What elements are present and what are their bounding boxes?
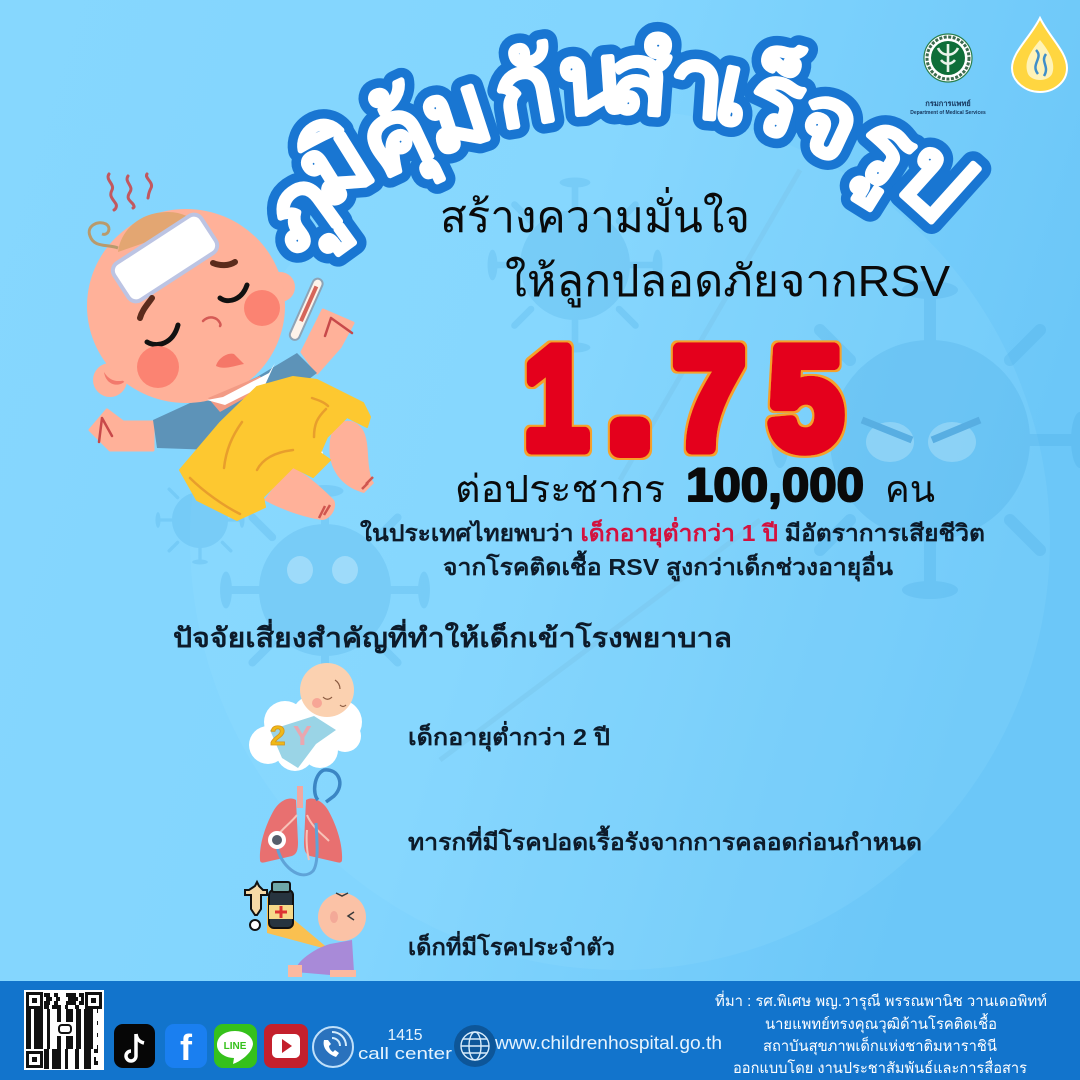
description	[360, 516, 985, 582]
title: curved headline: ภู	[241, 145, 362, 278]
title: curved headline: ป	[875, 118, 995, 241]
key number: 1	[524, 318, 588, 479]
title: curved headline: ม	[408, 51, 503, 176]
risk item 2 label: ทารกที่มีโรคปอดเรื้อรังจากการคลอดก่อนกำหนด	[408, 825, 922, 855]
title: curved headline: คุ้	[342, 72, 451, 206]
per population line	[455, 458, 935, 511]
key number: 5	[769, 319, 843, 479]
source credit: สถาบันสุขภาพเด็กแห่งชาติมหาราชินี	[763, 1036, 997, 1056]
risk item 3: baby with medicine	[245, 882, 366, 977]
icon: globe	[454, 1025, 496, 1067]
subtitle: สร้างความมั่นใจ	[440, 186, 750, 242]
title: curved headline: จ	[780, 59, 878, 183]
title: curved headline: น	[554, 22, 629, 136]
website: www.childrenhospital.go.th	[494, 1033, 722, 1053]
icon: line	[214, 1024, 257, 1068]
source credit: ที่มา : รศ.พิเศษ พญ.วารุณี พรรณพานิช วานเดอพิทท์	[715, 990, 1047, 1011]
title: curved headline: จ	[780, 59, 878, 183]
per population line: ต่อประชากร	[455, 469, 665, 511]
title: curved headline: รู	[830, 88, 937, 215]
call center label: call center	[358, 1044, 452, 1063]
risk item 3 label: เด็กที่มีโรคประจำตัว	[408, 930, 615, 960]
key number	[524, 318, 843, 480]
logo: Department of Medical Services	[910, 34, 986, 116]
logo: Department of Medical Services: Department of Medical Services	[910, 110, 986, 116]
title: curved headline: กั	[485, 31, 564, 149]
call center label	[358, 1027, 452, 1063]
logo: Department of Medical Services: กรมการแพทย์	[925, 99, 971, 108]
icon: call center	[313, 1027, 353, 1067]
title: curved headline	[241, 22, 995, 278]
risk item 1: under 2 years	[249, 663, 362, 771]
risk item 2: lungs	[260, 770, 342, 875]
footer bar	[0, 981, 1080, 1080]
title: curved headline: สำ	[606, 22, 728, 140]
icon: youtube	[264, 1024, 308, 1068]
title: curved headline: ร็	[736, 36, 818, 160]
title: curved headline: เ	[706, 33, 762, 147]
description: ในประเทศไทยพบว่า เด็กอายุต่ำกว่า 1 ปี มีอัตราการเสียชีวิต	[360, 516, 985, 548]
title: curved headline: มิ	[278, 100, 391, 228]
subtitle: ให้ลูกปลอดภัยจากRSV	[505, 256, 951, 308]
source credit: นายแพทย์ทรงคุณวุฒิด้านโรคติดเชื้อ	[765, 1013, 997, 1034]
icon: tiktok	[114, 1024, 155, 1068]
title: curved headline: ร็	[736, 36, 818, 160]
title: curved headline: ภู	[241, 145, 362, 278]
source credit	[715, 990, 1047, 1077]
key number: 7	[673, 319, 745, 480]
risk item 1: under 2 years: 2	[270, 720, 286, 751]
title: curved headline: มิ	[278, 100, 391, 228]
title: curved headline: กั	[485, 31, 564, 149]
per population line: 100,000	[686, 458, 864, 511]
title: curved headline: สำ	[606, 22, 728, 140]
title: curved headline: คุ้	[342, 72, 451, 206]
title: curved headline: น	[554, 22, 629, 136]
description: จากโรคติดเชื้อ RSV สูงกว่าเด็กช่วงอายุอื่น	[443, 550, 893, 582]
subtitle	[440, 186, 951, 308]
risk item 1 label: เด็กอายุต่ำกว่า 2 ปี	[408, 720, 610, 752]
source credit: ออกแบบโดย งานประชาสัมพันธ์และการสื่อสาร	[733, 1057, 1027, 1077]
title: curved headline: รู	[830, 88, 937, 215]
icon: facebook	[165, 1024, 207, 1068]
key number: .	[610, 318, 650, 479]
risk item 1: under 2 years: Y	[293, 720, 312, 751]
per population line: คน	[885, 469, 935, 511]
title: curved headline: ม	[408, 51, 503, 176]
risk factors heading: ปัจจัยเสี่ยงสำคัญที่ทำให้เด็กเข้าโรงพยาบาล	[173, 618, 732, 654]
icon: facebook: f	[180, 1027, 193, 1068]
call center label: 1415	[388, 1027, 423, 1044]
title: curved headline: ป	[875, 118, 995, 241]
icon: line: LINE	[224, 1041, 247, 1052]
logo: golden drop	[1012, 18, 1067, 92]
title: curved headline: เ	[706, 33, 762, 147]
QR code	[24, 990, 104, 1070]
baby illustration	[87, 174, 374, 520]
